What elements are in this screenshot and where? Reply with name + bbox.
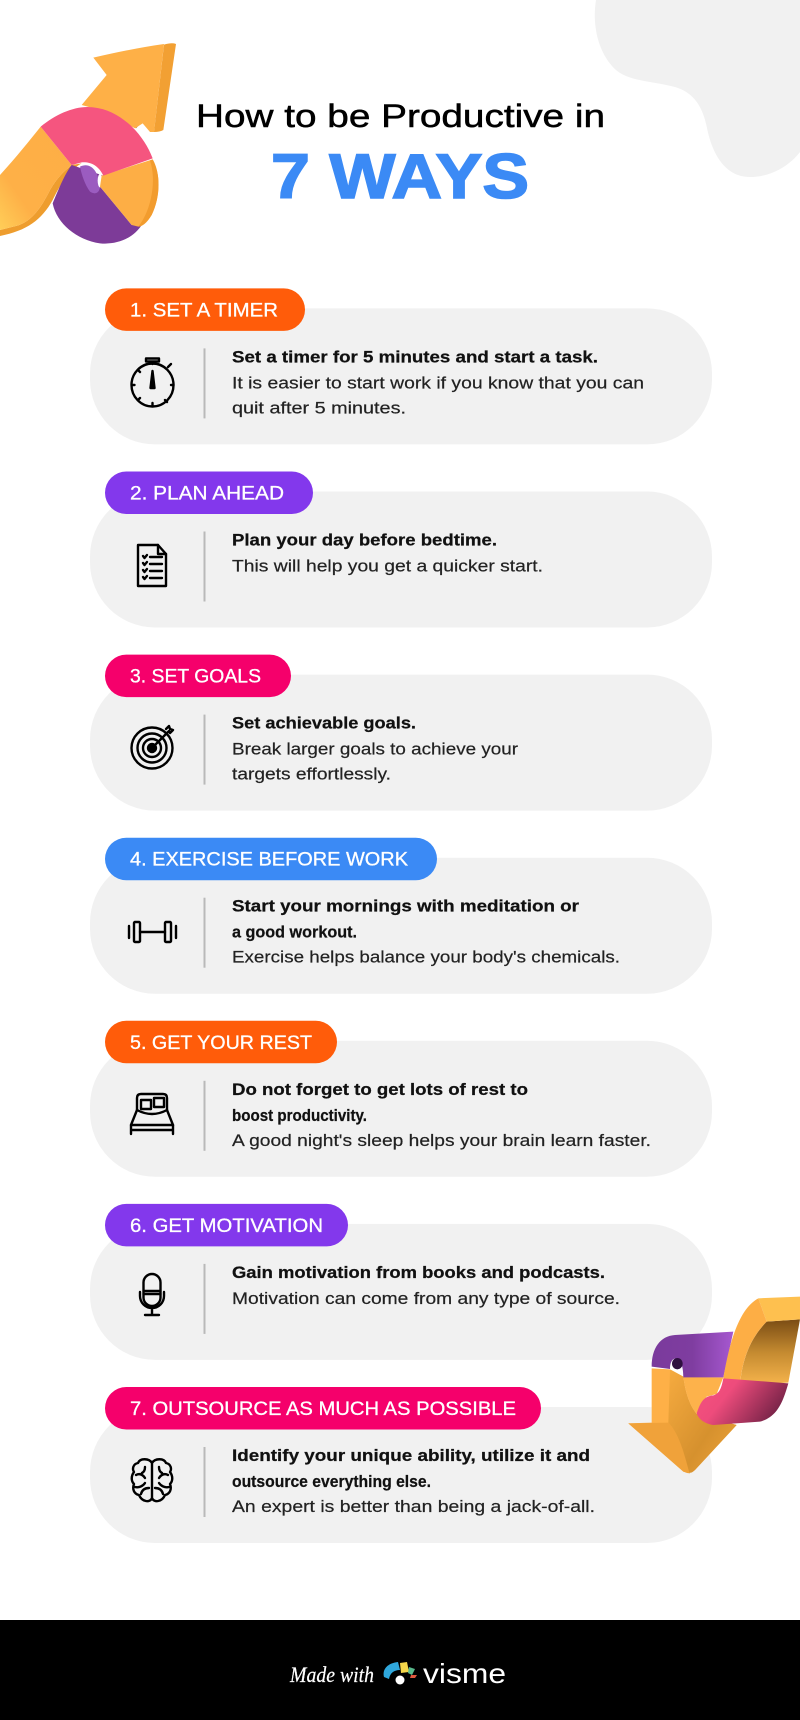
title line 1: How to be Productive in [196,98,605,134]
heading pill 6: 6. GET MOTIVATION [130,1215,323,1237]
title line 2: 7 WAYS [271,142,529,212]
icon: microphone [140,1274,164,1315]
heading pill 3: 3. SET GOALS [130,666,261,688]
icon: target [132,726,173,768]
text block 3: targets effortlessly. [232,766,391,784]
text block 2: Plan your day before bedtime. [232,532,497,550]
text block 1: quit after 5 minutes. [232,399,406,417]
heading pill 3 [105,655,291,697]
text block 6: Motivation can come from any type of source. [232,1290,620,1308]
text block 5: Do not forget to get lots of rest to [232,1081,528,1099]
icon: visme logo [384,1662,417,1684]
text block 5: boost productivity. [232,1107,367,1125]
panel: 5 get your rest [90,1021,712,1177]
panel: 1 set a timer [90,288,712,444]
panel: 6 get motivation [90,1204,712,1360]
text block 5 [232,1081,651,1150]
title [196,98,605,212]
icon: checklist document [138,545,166,586]
text block 4: Start your mornings with meditation or [232,898,580,916]
text block 3: Break larger goals to achieve your [232,741,519,759]
heading pill 2 [105,472,313,514]
heading pill 4: 4. EXERCISE BEFORE WORK [130,849,408,871]
illustration: rising 3D arrow [0,43,176,244]
icon: dumbbell [129,922,176,942]
heading pill 5: 5. GET YOUR REST [130,1032,312,1054]
text block 7: Identify your unique ability, utilize it and [232,1447,590,1465]
text block 7: An expert is better than being a jack-of-all. [232,1498,595,1516]
text block 1 [232,348,644,417]
visme wordmark: visme [423,1658,506,1689]
icon: brain [132,1459,172,1501]
illustration: falling 3D arrow [628,1297,800,1473]
text block 2 [232,532,543,576]
text block 7 [232,1447,595,1516]
panel: 4 exercise before work [90,838,712,994]
text block 4: Exercise helps balance your body's chemicals. [232,949,620,967]
text block 1: Set a timer for 5 minutes and start a task. [232,348,598,366]
panel: 7 outsource [90,1387,712,1543]
icon: stopwatch [132,358,174,406]
text block 7: outsource everything else. [232,1473,431,1491]
heading pill 1: 1. SET A TIMER [130,299,278,321]
heading pill 4 [105,838,437,880]
panel: 3 set goals [90,655,712,811]
text block 1: It is easier to start work if you know that you can [232,374,644,392]
heading pill 2: 2. PLAN AHEAD [130,482,284,504]
made with text: Made with [289,1662,374,1687]
text block 6 [232,1264,620,1308]
text block 4: a good workout. [232,924,357,942]
footer [0,1620,800,1720]
text block 3 [232,715,519,784]
text block 6: Gain motivation from books and podcasts. [232,1264,605,1282]
panel: 2 plan ahead [90,472,712,628]
heading pill 1 [105,288,305,331]
heading pill 6 [105,1204,348,1246]
heading pill 7: 7. OUTSOURCE AS MUCH AS POSSIBLE [130,1398,516,1420]
text block 4 [232,898,620,967]
icon: bed [131,1094,173,1134]
background blob [595,0,800,177]
heading pill 7 [105,1387,541,1430]
heading pill 5 [105,1021,337,1063]
text block 5: A good night's sleep helps your brain learn faster. [232,1132,651,1150]
text block 2: This will help you get a quicker start. [232,558,543,576]
text block 3: Set achievable goals. [232,715,416,733]
